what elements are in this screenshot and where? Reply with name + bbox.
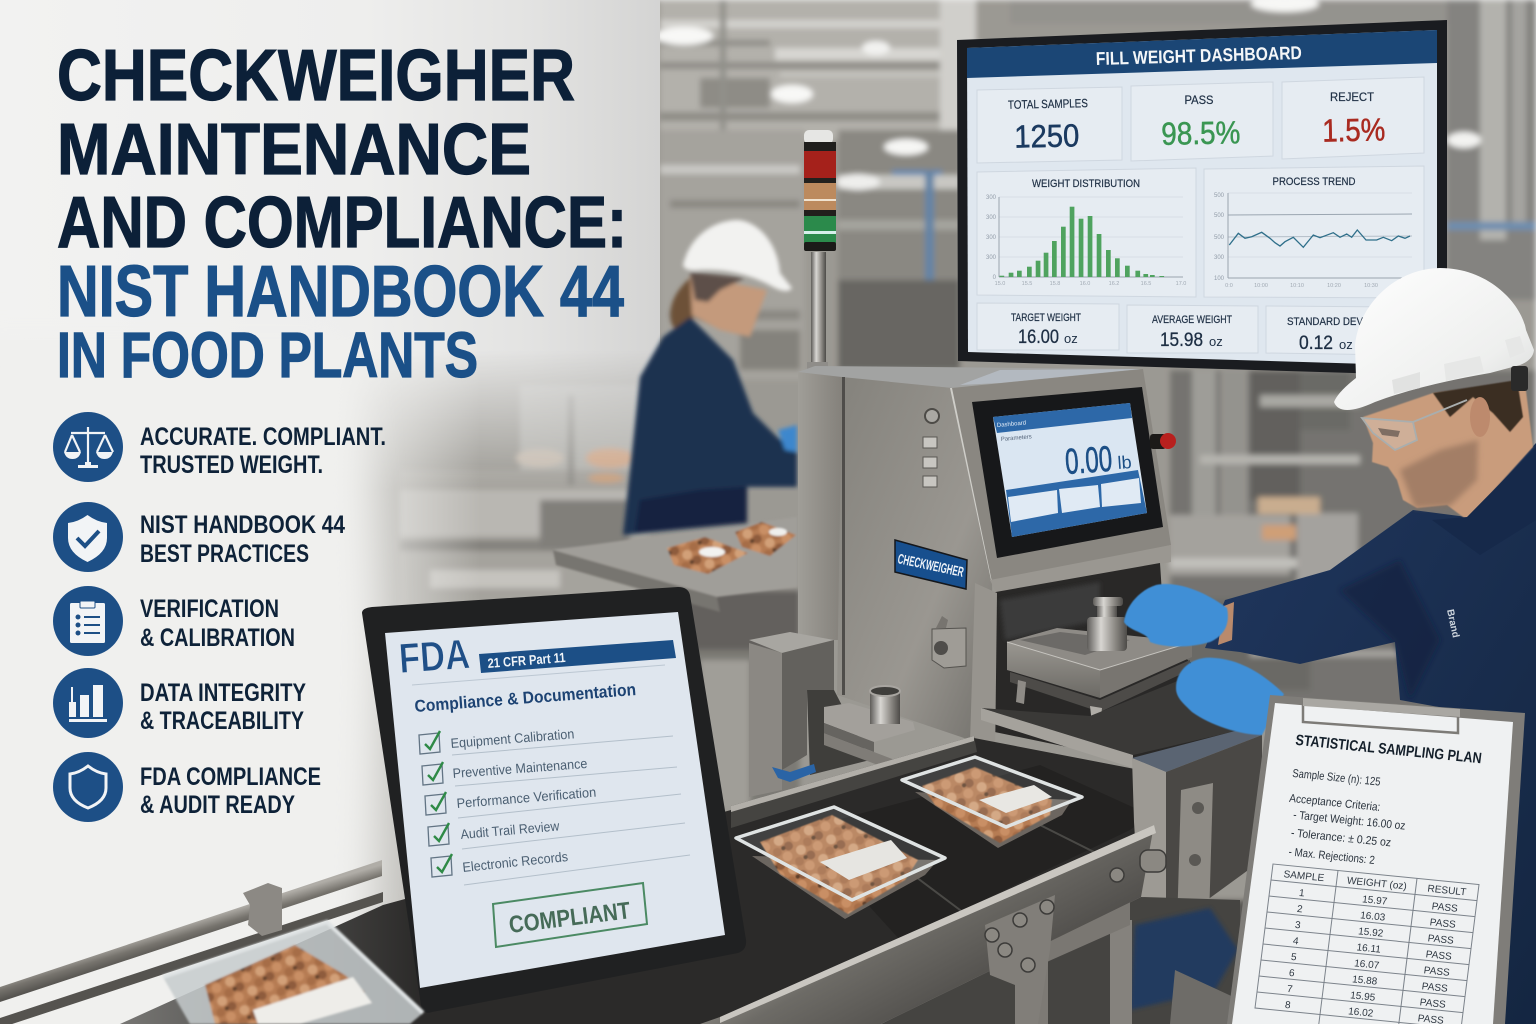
checkweigher machine: Dashboard (997, 420, 1026, 429)
title: MAINTENANCE (57, 110, 531, 190)
weight distribution histogram: 15.8 (1050, 281, 1060, 287)
KPI: reject rate: REJECT (1330, 90, 1375, 104)
sample table: 15.92 (1358, 926, 1384, 940)
KPI: standard deviation: 0.12 (1299, 333, 1333, 354)
plan heading: STATISTICAL SAMPLING PLAN (1295, 732, 1483, 767)
head panel (952, 369, 1171, 582)
KPI: average weight (1127, 305, 1258, 353)
low rail tube on left (0, 892, 383, 1024)
process trend line chart: 300 (1214, 255, 1225, 261)
foreground inspector with hard hat and safety glasses (1124, 268, 1536, 1024)
rail clamp (243, 883, 282, 936)
title: NIST HANDBOOK 44 (57, 252, 624, 332)
rear conveyor rail (731, 736, 977, 828)
conveyor (0, 725, 1262, 1024)
feature: verification and calibration (53, 586, 295, 656)
ear (1470, 397, 1490, 437)
sample table: 7 (1286, 984, 1294, 995)
process trend line chart (1204, 166, 1424, 298)
checkweigher badge (895, 540, 967, 589)
sample table: PASS (1423, 965, 1451, 979)
icon: outline shield (53, 752, 123, 822)
feature: NIST Handbook 44 best practices: NIST HANDBOOK 44 (140, 511, 345, 539)
process trend line chart: 10:10 (1290, 283, 1304, 289)
sample table: 5 (1290, 952, 1298, 963)
KPI: pass rate: 98.5% (1161, 114, 1241, 152)
weight distribution histogram: 17.0 (1176, 281, 1186, 287)
sample table: 4 (1292, 936, 1300, 947)
KPI: target weight (977, 303, 1119, 350)
process trend line chart: 100 (1214, 276, 1225, 282)
calibration test weight (1087, 597, 1127, 651)
process trend line chart: 0:0 (1225, 283, 1233, 289)
weighing cavity (985, 563, 1262, 760)
checklist: Audit Trail Review (460, 818, 560, 842)
sample table: PASS (1421, 981, 1449, 995)
sampling plan text and table (1252, 731, 1496, 1024)
KPI: standard deviation (1266, 306, 1400, 355)
feature: accurate, compliant, trusted weight: ACCURATE. COMPLIANT. (140, 423, 386, 451)
lower shelf (981, 680, 1262, 755)
skin at upper wrist (1218, 602, 1234, 645)
sample table: PASS (1425, 949, 1453, 963)
door edge column (970, 583, 997, 762)
shirt (1205, 443, 1536, 1024)
KPI: reject rate (1282, 77, 1424, 159)
KPI: pass rate: PASS (1184, 93, 1214, 107)
regulation label: 21 CFR Part 11 (487, 650, 566, 671)
hard hat (1334, 268, 1534, 410)
weight distribution histogram: 16.2 (1109, 281, 1119, 287)
feature: FDA compliance and audit ready: & AUDIT READY (140, 791, 295, 819)
sample table: 3 (1294, 920, 1302, 931)
narrow left cabinet panel (798, 372, 842, 640)
clipboard board (1227, 695, 1525, 1024)
sample table: PASS (1419, 997, 1447, 1011)
KPI: average weight: oz (1209, 334, 1223, 349)
rear table with packages (553, 517, 797, 612)
left block housing (749, 632, 870, 797)
blue fitting (772, 764, 816, 782)
feature: NIST Handbook 44 best practices (53, 502, 345, 572)
KPI: target weight: TARGET WEIGHT (1011, 312, 1081, 324)
signal stack light (804, 130, 836, 373)
checklist (419, 726, 690, 885)
KPI: standard deviation: oz (1339, 337, 1353, 352)
sample table: RESULT (1427, 884, 1467, 898)
icon: shield with check (53, 502, 123, 572)
weight distribution histogram: 300 (986, 235, 997, 241)
acceptance criteria: Acceptance Criteria: (1289, 793, 1381, 814)
compliance tablet (362, 587, 746, 1013)
touchscreen display (993, 403, 1147, 537)
weight distribution histogram: 300 (986, 195, 997, 201)
weight distribution histogram: 0 (993, 275, 997, 281)
upper blue glove holding weight (1124, 584, 1228, 646)
food tray on conveyor, rear (902, 757, 1082, 848)
bracket and coupling (824, 686, 915, 775)
weight distribution histogram: 300 (986, 215, 997, 221)
lower blue glove (1176, 658, 1284, 735)
touchscreen bezel (972, 387, 1163, 558)
checkweigher machine: Parameters (1001, 434, 1032, 443)
KPI: reject rate: 1.5% (1322, 111, 1386, 149)
door latch (932, 616, 966, 668)
checklist: Performance Verification (456, 785, 597, 811)
skin: face and neck (1363, 383, 1533, 520)
feature: data integrity and traceability (53, 668, 306, 738)
display header band (993, 403, 1132, 433)
title (57, 36, 627, 391)
checkweigher badge: CHECKWEIGHER (896, 550, 965, 580)
process trend line chart: 10:30 (1364, 283, 1378, 289)
paper sheet (1232, 703, 1513, 1024)
sample table: PASS (1427, 933, 1455, 947)
regulation band (479, 640, 676, 673)
feature list (53, 412, 386, 822)
weight distribution histogram: 15.5 (1022, 281, 1032, 287)
feature: FDA compliance and audit ready (53, 752, 321, 822)
background worker in blue jacket and hard hat (623, 220, 797, 535)
title: AND COMPLIANCE: (57, 183, 627, 263)
left white wall panel (0, 0, 660, 1024)
clipboard: statistical sampling plan (1227, 695, 1525, 1024)
chest logo: Brand (1444, 608, 1461, 639)
sample table: 8 (1284, 1000, 1292, 1011)
sample table (1252, 864, 1479, 1024)
sample table: SAMPLE (1283, 869, 1325, 884)
sample table: WEIGHT (oz) (1346, 876, 1407, 892)
KPI: average weight: AVERAGE WEIGHT (1152, 314, 1232, 326)
front conveyor rail (700, 825, 1154, 1024)
strip under head (990, 545, 1171, 594)
hat strap (1511, 366, 1528, 391)
KPI: total samples (977, 87, 1122, 163)
process trend line chart: 10:20 (1327, 283, 1341, 289)
feature: accurate, compliant, trusted weight (53, 412, 386, 482)
acceptance criteria: Sample Size (n): 125 (1292, 768, 1381, 789)
weight distribution histogram: WEIGHT DISTRIBUTION (1032, 178, 1140, 190)
sample table: 16.11 (1356, 942, 1382, 956)
acceptance criteria: - Target Weight: 16.00 oz (1293, 809, 1406, 833)
food tray, foreground bottom left (163, 922, 423, 1024)
icon: balance scales (53, 412, 123, 482)
checklist: Equipment Calibration (450, 726, 575, 751)
sample table: 6 (1288, 968, 1296, 979)
sample table: 2 (1296, 904, 1304, 915)
weight distribution histogram: 16.5 (1141, 281, 1151, 287)
safety glasses (1362, 400, 1467, 450)
feature: accurate, compliant, trusted weight: TRUSTED WEIGHT. (140, 451, 323, 479)
title: IN FOOD PLANTS (57, 319, 478, 391)
collar (1432, 447, 1536, 555)
sample table: 16.07 (1354, 958, 1380, 972)
sample table: PASS (1431, 901, 1459, 915)
checklist: Electronic Records (462, 849, 569, 875)
weight distribution histogram: 300 (986, 255, 997, 261)
emergency stop button (1150, 433, 1176, 449)
tablet heading: Compliance & Documentation (414, 680, 637, 716)
rail bolts and coupling (985, 850, 1166, 972)
dashboard title: FILL WEIGHT DASHBOARD (1096, 42, 1302, 69)
sample table: PASS (1429, 917, 1457, 931)
checkweigher machine: lb (1117, 452, 1132, 473)
feature: verification and calibration: & CALIBRATION (140, 624, 295, 652)
process trend line chart: 500 (1214, 213, 1225, 219)
sample table: 1 (1298, 888, 1306, 899)
weight distribution histogram: 16.0 (1080, 281, 1090, 287)
tablet screen (385, 612, 725, 988)
food tray on conveyor, front (736, 807, 945, 919)
icon: bar chart (53, 668, 123, 738)
process trend line chart: 10:00 (1254, 283, 1268, 289)
weight readout: 0.00 (1064, 438, 1113, 482)
acceptance criteria: - Tolerance: ± 0.25 oz (1290, 827, 1392, 849)
checklist: Preventive Maintenance (452, 756, 588, 781)
process trend line chart: 500 (1214, 235, 1225, 241)
right side housing (1132, 725, 1262, 930)
title: CHECKWEIGHER (57, 36, 575, 116)
main front panel (837, 377, 995, 760)
KPI: target weight: oz (1064, 331, 1078, 346)
feature: FDA compliance and audit ready: FDA COMPLIANCE (140, 763, 321, 791)
feature: data integrity and traceability: & TRACEABILITY (140, 707, 304, 735)
wall-mounted fill weight dashboard monitor (957, 20, 1447, 378)
scale platform (1007, 628, 1192, 726)
sample table: 15.88 (1352, 974, 1378, 988)
KPI: total samples: 1250 (1014, 117, 1080, 155)
icon: clipboard checklist (53, 586, 123, 656)
monitor bezel (957, 20, 1447, 378)
compliant stamp (493, 883, 647, 947)
display lower band (1006, 470, 1147, 537)
compliant stamp: COMPLIANT (507, 897, 632, 939)
sample table: 15.95 (1350, 990, 1376, 1004)
sleeve shadow (1340, 560, 1440, 700)
KPI: average weight: 15.98 (1160, 330, 1203, 351)
acceptance criteria (1282, 768, 1411, 870)
upper rail tube on left (0, 860, 382, 1002)
monitor screen (967, 30, 1437, 366)
beard shadow (1400, 440, 1478, 508)
weight distribution histogram (977, 168, 1196, 297)
checkweigher machine (749, 366, 1262, 797)
process trend line chart: 500 (1214, 193, 1225, 199)
under-conveyor frame and motors (881, 897, 1240, 1024)
weight distribution histogram: 15.0 (995, 281, 1005, 287)
metal clip (1303, 702, 1458, 733)
process trend line chart: PROCESS TREND (1272, 176, 1356, 188)
panel knob and switches (923, 409, 939, 487)
acceptance criteria: - Max. Rejections: 2 (1288, 846, 1375, 867)
feature: NIST Handbook 44 best practices: BEST PRACTICES (140, 540, 309, 568)
KPI: total samples: TOTAL SAMPLES (1008, 96, 1088, 112)
feature: verification and calibration: VERIFICATION (140, 595, 279, 623)
feature: data integrity and traceability: DATA INTEGRITY (140, 679, 306, 707)
KPI: target weight: 16.00 (1018, 327, 1059, 348)
KPI: pass rate (1131, 82, 1273, 161)
hair (1433, 380, 1523, 432)
sample table: 15.97 (1362, 894, 1388, 908)
machine top surface (798, 366, 1143, 388)
KPI: standard deviation: STANDARD DEV (1287, 316, 1364, 328)
sample table: 16.03 (1360, 910, 1386, 924)
dashboard header band (967, 30, 1437, 78)
eye shadow (1378, 428, 1400, 437)
conveyor belt (120, 738, 1154, 1024)
sample table: 16.02 (1348, 1006, 1374, 1020)
tablet body (362, 587, 746, 1013)
FDA logo: FDA (397, 630, 471, 682)
